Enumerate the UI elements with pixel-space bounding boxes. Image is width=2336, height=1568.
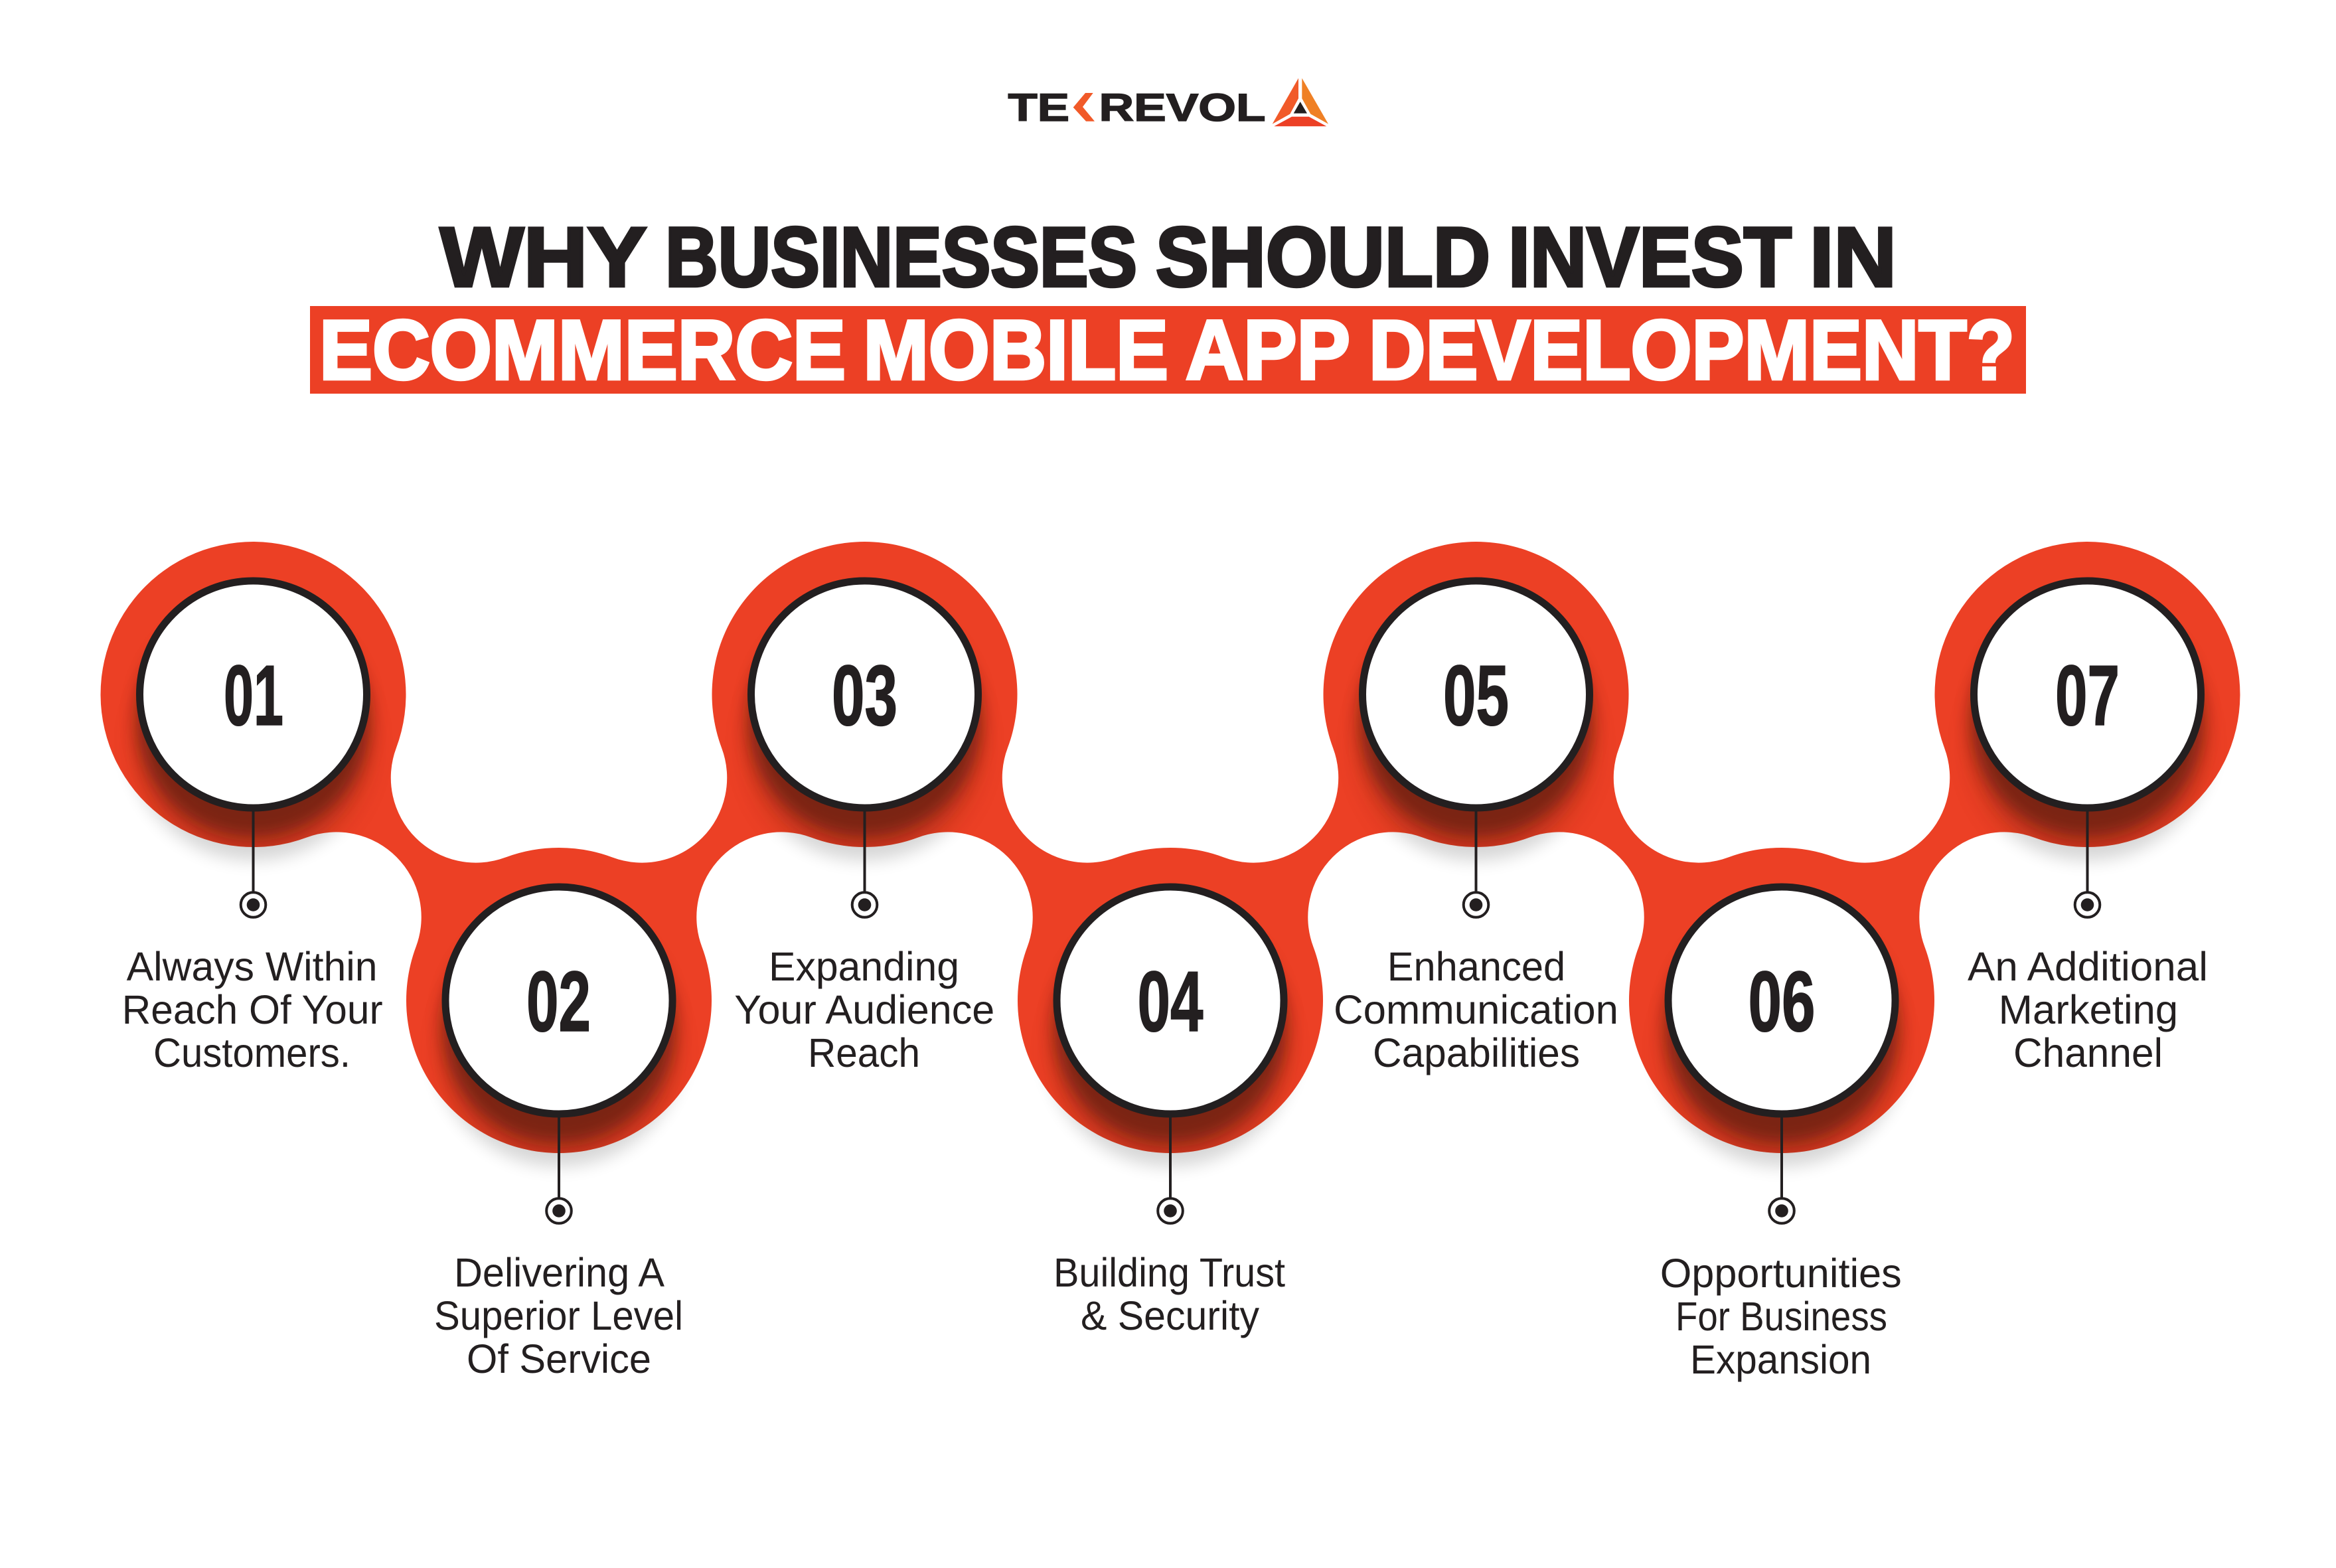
step 05 <box>1334 581 1618 1075</box>
label 01: Reach Of Your <box>122 987 383 1032</box>
label 06: For Business <box>1675 1294 1887 1339</box>
step 04 <box>1053 887 1285 1338</box>
label 07: Marketing <box>1999 987 2178 1032</box>
pointer 07 <box>2075 811 2100 917</box>
label 02: Of Service <box>467 1336 651 1381</box>
number 03: 03 <box>832 648 897 744</box>
label 03: Reach <box>808 1030 920 1075</box>
circle 01 <box>139 581 366 808</box>
label 07: An Additional <box>1968 944 2208 989</box>
circle 03 <box>751 581 978 808</box>
title line 2: DEVELOPMENT? <box>1369 303 2015 397</box>
title line 2: APP <box>1186 303 1350 397</box>
number 04: 04 <box>1138 954 1204 1050</box>
title line 1: SHOULD <box>1156 210 1490 304</box>
number 02: 02 <box>526 954 591 1050</box>
label 06 <box>1660 1251 1902 1382</box>
label 01: Customers. <box>153 1030 350 1075</box>
pointer 01 <box>241 811 266 917</box>
circle 02 <box>445 887 672 1114</box>
logo: TEKREVOL <box>1008 78 1328 129</box>
step 02 <box>434 887 683 1381</box>
label 06: Expansion <box>1690 1337 1871 1382</box>
title line 2 <box>319 303 2015 397</box>
label 03: Expanding <box>769 944 959 989</box>
title line 2: ECOMMERCE <box>319 303 846 397</box>
label 07: Channel <box>2013 1030 2163 1075</box>
pointer 05 <box>1464 811 1488 917</box>
label 02 <box>434 1250 683 1381</box>
number 07: 07 <box>2055 648 2120 744</box>
logo: TEKREVOL: REVOL <box>1099 86 1265 129</box>
soft grey shadows under the lower lobes <box>127 608 2213 1166</box>
circle 05 <box>1362 581 1589 808</box>
number 05: 05 <box>1443 648 1509 744</box>
label 04: Building Trust <box>1053 1250 1285 1295</box>
title line 1: BUSINESSES <box>665 210 1137 304</box>
title highlight bar <box>310 306 2026 394</box>
step 03 <box>734 581 994 1075</box>
label 05: Communication <box>1334 987 1618 1032</box>
step 06 <box>1660 887 1902 1382</box>
title <box>310 210 2026 397</box>
circle 06 <box>1668 887 1895 1114</box>
title line 1: WHY <box>440 210 647 304</box>
label 04: & Security <box>1081 1293 1259 1338</box>
label 03: Your Audience <box>734 987 994 1032</box>
number 01: 01 <box>224 648 283 744</box>
step 01 <box>122 581 383 1075</box>
label 03 <box>734 944 994 1075</box>
title line 1: INVEST <box>1508 210 1792 304</box>
label 07 <box>1968 944 2208 1075</box>
pointer 06 <box>1769 1117 1794 1223</box>
step 07 <box>1968 581 2208 1075</box>
label 04 <box>1053 1250 1285 1338</box>
inner shadows on the red shape <box>123 659 2217 1153</box>
pointer 04 <box>1158 1117 1183 1223</box>
label 02: Delivering A <box>454 1250 664 1295</box>
pointer 02 <box>546 1117 572 1223</box>
label 02: Superior Level <box>434 1293 683 1338</box>
logo: TEKREVOL: TE <box>1008 86 1069 129</box>
red winding connector shape <box>101 542 2240 1153</box>
title line 1: IN <box>1810 210 1897 304</box>
circle 07 <box>1974 581 2201 808</box>
label 01: Always Within <box>127 944 378 989</box>
pointer 03 <box>852 811 877 917</box>
label 05: Enhanced <box>1387 944 1565 989</box>
label 05 <box>1334 944 1618 1075</box>
number 06: 06 <box>1749 954 1815 1050</box>
label 01 <box>122 944 383 1075</box>
label 05: Capabilities <box>1373 1030 1580 1075</box>
label 06: Opportunities <box>1660 1251 1902 1296</box>
circle 04 <box>1057 887 1284 1114</box>
title line 1 <box>440 210 1897 304</box>
title line 2: MOBILE <box>863 303 1168 397</box>
